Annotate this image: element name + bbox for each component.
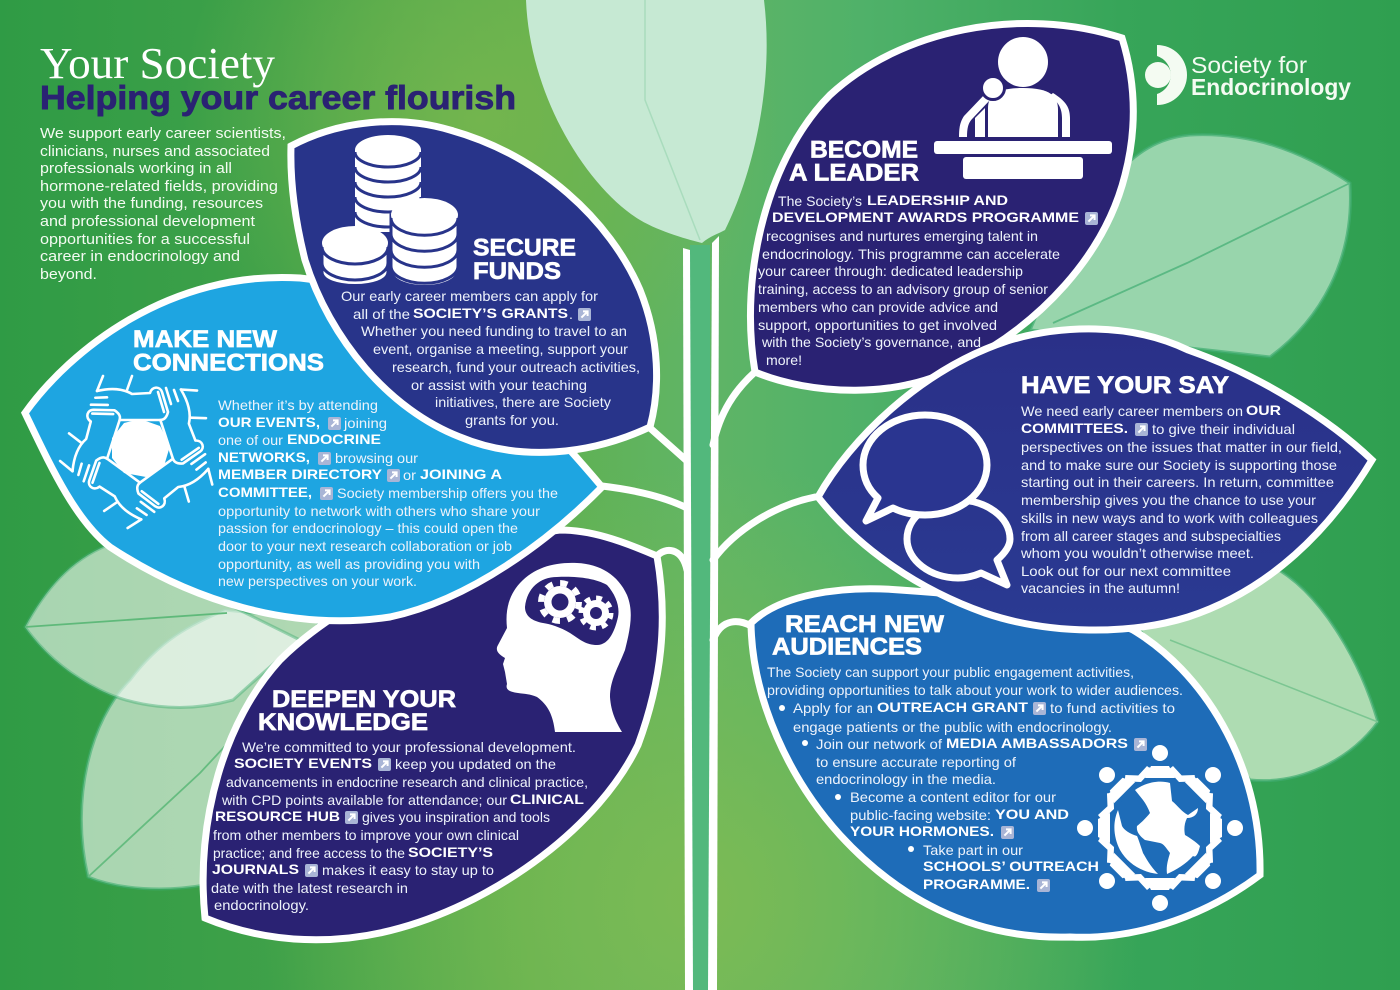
text: deepen your knowledge: keep you updated on the — [395, 756, 556, 772]
text: deepen your knowledge: advancements in endocrine research and clinical practice, — [226, 774, 588, 790]
icon: people around a globe — [1077, 745, 1243, 911]
text: make new connections: joining — [343, 415, 387, 431]
text: have your say: starting out in their careers. In return, committee — [1021, 474, 1334, 490]
logo: Society for Endocrinology: Society for — [1191, 52, 1307, 78]
panel: deepen your knowledge — [203, 530, 662, 940]
icon: speech bubbles — [863, 415, 1010, 585]
heading: deepen your knowledge: KNOWLEDGE — [258, 709, 428, 736]
text: reach new audiences: to ensure accurate reporting of — [816, 754, 1016, 770]
background leaf: right lower — [1140, 565, 1378, 781]
heading: become a leader — [789, 136, 919, 186]
intro text: clinicians, nurses and associated — [40, 143, 270, 160]
heading: secure funds — [473, 234, 576, 285]
intro text — [40, 125, 286, 283]
text: have your say: and to make sure our Society is supporting those — [1021, 457, 1337, 473]
text: have your say: membership gives you the chance to use your — [1021, 492, 1316, 508]
heading: reach new audiences — [772, 611, 945, 660]
text: make new connections: ENDOCRINE — [287, 431, 381, 447]
text: make new connections: or — [403, 467, 416, 483]
text: reach new audiences: MEDIA AMBASSADORS — [946, 735, 1128, 751]
text: make new connections: MEMBER DIRECTORY — [218, 466, 383, 482]
text: reach new audiences: Take part in our — [923, 842, 1023, 858]
text: deepen your knowledge: CLINICAL — [510, 791, 585, 807]
text: make new connections: Whether it’s by attending — [218, 397, 378, 413]
text: have your say: perspectives on the issues that matter in our field, — [1021, 439, 1342, 455]
text: become a leader: The Society’s — [778, 193, 862, 209]
text: become a leader: endocrinology. This programme can accelerate — [762, 246, 1060, 262]
icon: joined hands — [58, 376, 220, 532]
text: reach new audiences: The Society can support your public engagement activities, — [767, 664, 1134, 680]
text: deepen your knowledge: gives you inspiration and tools — [362, 809, 550, 825]
heading: become a leader: BECOME — [810, 136, 918, 164]
text: make new connections — [218, 397, 558, 589]
text: secure funds: research, fund your outreach activities, — [392, 359, 640, 375]
icon: head with gears — [497, 563, 631, 732]
text: have your say — [1020, 402, 1342, 596]
heading: reach new audiences: REACH NEW — [785, 611, 945, 638]
text: become a leader: members who can provide advice and — [758, 299, 998, 315]
text: reach new audiences: YOUR HORMONES. — [850, 823, 994, 839]
text: secure funds: . — [569, 306, 573, 322]
title: Helping your career flourish — [40, 79, 516, 116]
panel: have your say — [818, 329, 1372, 630]
intro text: opportunities for a successful — [40, 231, 250, 248]
text: reach new audiences: PROGRAMME. — [923, 876, 1030, 892]
text: reach new audiences: providing opportunities to talk about your work to wider audiences. — [767, 682, 1183, 698]
text: reach new audiences: endocrinology in the media. — [816, 771, 996, 787]
text: reach new audiences: public-facing website: — [850, 807, 991, 823]
heading: make new connections: MAKE NEW — [133, 326, 278, 353]
intro text: beyond. — [40, 266, 97, 283]
heading: secure funds: SECURE — [473, 234, 576, 262]
text: make new connections: opportunity to network with others who share your — [218, 503, 540, 519]
text: make new connections: door to your next research collaboration or job — [218, 538, 512, 554]
text: make new connections: browsing our — [335, 450, 418, 466]
intro text: you with the funding, resources — [40, 195, 263, 212]
text: become a leader: DEVELOPMENT AWARDS PROGRAMME — [772, 209, 1079, 225]
heading: make new connections: CONNECTIONS — [133, 350, 324, 376]
text: secure funds: grants for you. — [465, 412, 559, 428]
background leaf: left lower — [81, 610, 320, 889]
text: have your say: vacancies in the autumn! — [1021, 580, 1180, 596]
text: become a leader — [758, 192, 1098, 368]
heading: secure funds: FUNDS — [473, 258, 561, 285]
text: secure funds: event, organise a meeting, support your — [373, 341, 628, 357]
text: become a leader: LEADERSHIP AND — [867, 192, 1008, 208]
text: reach new audiences: Join our network of — [816, 736, 942, 752]
text: secure funds: Whether you need funding to travel to an — [361, 323, 627, 339]
heading: reach new audiences: AUDIENCES — [772, 634, 922, 660]
background leaf: right upper — [1030, 135, 1350, 357]
plant stem and branches — [602, 236, 815, 990]
text: make new connections: OUR EVENTS, — [218, 414, 320, 430]
panel: become a leader — [750, 23, 1133, 390]
logo: Society for Endocrinology: Endocrinology — [1191, 74, 1351, 100]
text: become a leader: training, access to an advisory group of senior — [758, 281, 1048, 297]
text: secure funds: Our early career members can apply for — [341, 288, 598, 304]
text: make new connections: passion for endocrinology – this could open the — [218, 520, 518, 536]
panel: reach new audiences — [751, 589, 1260, 937]
background leaf: left middle — [25, 545, 300, 707]
text: deepen your knowledge: with CPD points available for attendance; our — [221, 792, 507, 808]
text: reach new audiences: SCHOOLS’ OUTREACH — [923, 858, 1099, 874]
text: reach new audiences: to fund activities to — [1050, 700, 1175, 716]
text: have your say: from all career stages and subspecialties — [1021, 528, 1281, 544]
panel: make new connections — [25, 277, 602, 621]
text: make new connections: one of our — [218, 432, 283, 448]
text: make new connections: new perspectives on your work. — [218, 573, 417, 589]
heading: deepen your knowledge — [258, 686, 456, 736]
background leaf: top centre — [526, 0, 767, 243]
text: deepen your knowledge: from other members to improve your own clinical — [213, 827, 519, 843]
text: have your say: to give their individual — [1152, 421, 1295, 437]
text: reach new audiences: YOU AND — [995, 806, 1069, 822]
intro text: hormone-related fields, providing — [40, 178, 278, 195]
text: have your say: Look out for our next committee — [1021, 563, 1231, 579]
text: make new connections: Society membership offers you the — [337, 485, 558, 501]
text: reach new audiences: Apply for an — [793, 700, 873, 716]
text: reach new audiences: engage patients or the public with endocrinology. — [793, 719, 1112, 735]
logo: Society for Endocrinology — [1145, 45, 1351, 105]
text: deepen your knowledge: SOCIETY EVENTS — [234, 755, 372, 771]
text: deepen your knowledge: date with the latest research in — [211, 880, 408, 896]
text: reach new audiences: Become a content editor for our — [850, 789, 1056, 805]
intro text: professionals working in all — [40, 160, 232, 177]
heading: become a leader: A LEADER — [789, 160, 919, 186]
intro text: career in endocrinology and — [40, 248, 240, 265]
text: reach new audiences — [767, 664, 1183, 892]
text: deepen your knowledge: endocrinology. — [214, 897, 309, 913]
text: have your say: We need early career members on — [1021, 403, 1243, 419]
title: Your Society — [40, 39, 275, 88]
text: secure funds — [341, 288, 640, 428]
text: deepen your knowledge: We’re committed to your professional development. — [242, 739, 576, 755]
text: have your say: skills in new ways and to work with colleagues — [1021, 510, 1318, 526]
text: make new connections: JOINING A — [420, 466, 502, 482]
text: become a leader: more! — [766, 352, 802, 368]
text: make new connections: NETWORKS, — [218, 449, 310, 465]
text: secure funds: initiatives, there are Society — [435, 394, 611, 410]
icon: stacks of coins — [322, 135, 458, 286]
text: become a leader: with the Society’s governance, and — [761, 334, 981, 350]
text: make new connections: COMMITTEE, — [218, 484, 312, 500]
text: become a leader: support, opportunities to get involved — [758, 317, 997, 333]
panel: secure funds — [291, 122, 657, 452]
text: make new connections: opportunity, as well as providing you with — [218, 556, 480, 572]
text: deepen your knowledge — [211, 739, 588, 913]
text: deepen your knowledge: JOURNALS — [212, 861, 299, 877]
text: secure funds: SOCIETY’S GRANTS — [413, 305, 568, 321]
title — [40, 39, 516, 116]
intro text: and professional development — [40, 213, 256, 230]
text: secure funds: or assist with your teaching — [411, 377, 587, 393]
text: become a leader: recognises and nurtures emerging talent in — [766, 228, 1038, 244]
text: become a leader: your career through: dedicated leadership — [758, 263, 1023, 279]
text: reach new audiences: OUTREACH GRANT — [877, 699, 1029, 715]
icon: speaker at lectern — [934, 37, 1112, 179]
text: have your say: COMMITTEES. — [1021, 420, 1128, 436]
text: have your say: OUR — [1246, 402, 1281, 418]
text: deepen your knowledge: makes it easy to stay up to — [322, 862, 494, 878]
intro text: We support early career scientists, — [40, 125, 286, 142]
heading: deepen your knowledge: DEEPEN YOUR — [272, 686, 456, 713]
heading: have your say: HAVE YOUR SAY — [1021, 372, 1229, 399]
text: secure funds: all of the — [353, 306, 410, 322]
text: deepen your knowledge: practice; and free access to the — [213, 845, 405, 861]
text: have your say: whom you wouldn’t otherwise meet. — [1020, 545, 1254, 561]
heading: make new connections — [133, 326, 324, 376]
text: deepen your knowledge: SOCIETY’S — [408, 844, 493, 860]
text: deepen your knowledge: RESOURCE HUB — [215, 808, 340, 824]
